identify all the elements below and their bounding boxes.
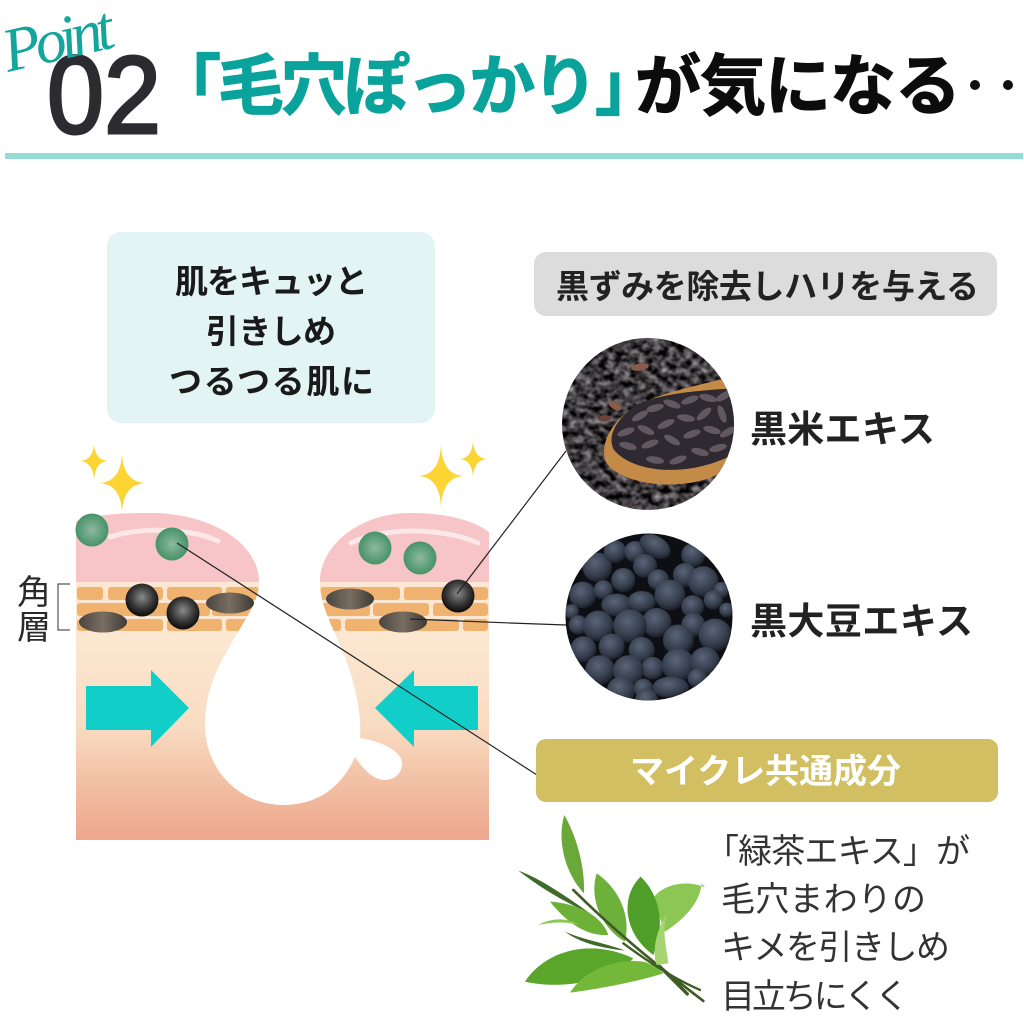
stratum corneum label: 角 — [17, 574, 51, 612]
number 02: 02 — [47, 34, 161, 157]
pill text: 黒ずみを除去しハリを与える — [556, 268, 979, 305]
message text: 肌をキュッと — [175, 263, 368, 300]
sparkles left — [80, 444, 146, 513]
stratum corneum band — [246, 585, 329, 620]
title ellipsis dots — [970, 80, 1013, 90]
icon: green tea sprig — [518, 815, 705, 1001]
title teal part: 「毛穴ぽっかり」 — [155, 49, 661, 123]
label second character: 層 — [17, 609, 51, 647]
rice in spoon — [611, 388, 738, 470]
panel: firming message — [107, 232, 435, 423]
green tea description: キメを引きしめ — [721, 929, 950, 967]
message text: つるつる肌に — [169, 363, 374, 400]
photo: black rice — [560, 336, 738, 512]
green tea particles — [76, 514, 436, 574]
arrow right pointing — [86, 670, 189, 747]
soybeans — [566, 534, 732, 700]
skin cell bricks — [77, 587, 488, 631]
dark pore spots — [79, 588, 427, 632]
stratum corneum label — [17, 574, 51, 647]
wooden spoon — [604, 375, 738, 484]
leader lines — [177, 451, 566, 775]
reddish grains — [599, 362, 649, 421]
photo: black soybeans — [564, 529, 734, 711]
sparkles right — [418, 441, 487, 508]
skin diagram — [70, 441, 495, 845]
green tea description: 毛穴まわりの — [721, 881, 926, 919]
bracket — [58, 584, 70, 630]
message text — [169, 263, 374, 400]
pill text: マイクレ共通成分 — [630, 753, 901, 791]
green tea description: 目立ちにくく — [721, 978, 909, 1016]
pill: dark ingredient heading — [534, 252, 997, 316]
black particles — [126, 580, 474, 630]
message text: 引きしめ — [206, 313, 336, 350]
title black part: が気になる — [635, 49, 961, 123]
arrow left pointing — [375, 670, 478, 747]
label: black soybean extract: 黒大豆エキス — [750, 601, 973, 642]
pink surface — [76, 513, 489, 582]
title rule — [5, 153, 1023, 159]
pill: shared ingredient heading — [536, 739, 998, 802]
label: black rice extract: 黒米エキス — [750, 409, 935, 450]
green tea description — [705, 833, 970, 1016]
green tea description: 「緑茶エキス」が — [705, 833, 970, 871]
skin body with pore — [70, 505, 495, 845]
surface highlights — [110, 530, 478, 543]
